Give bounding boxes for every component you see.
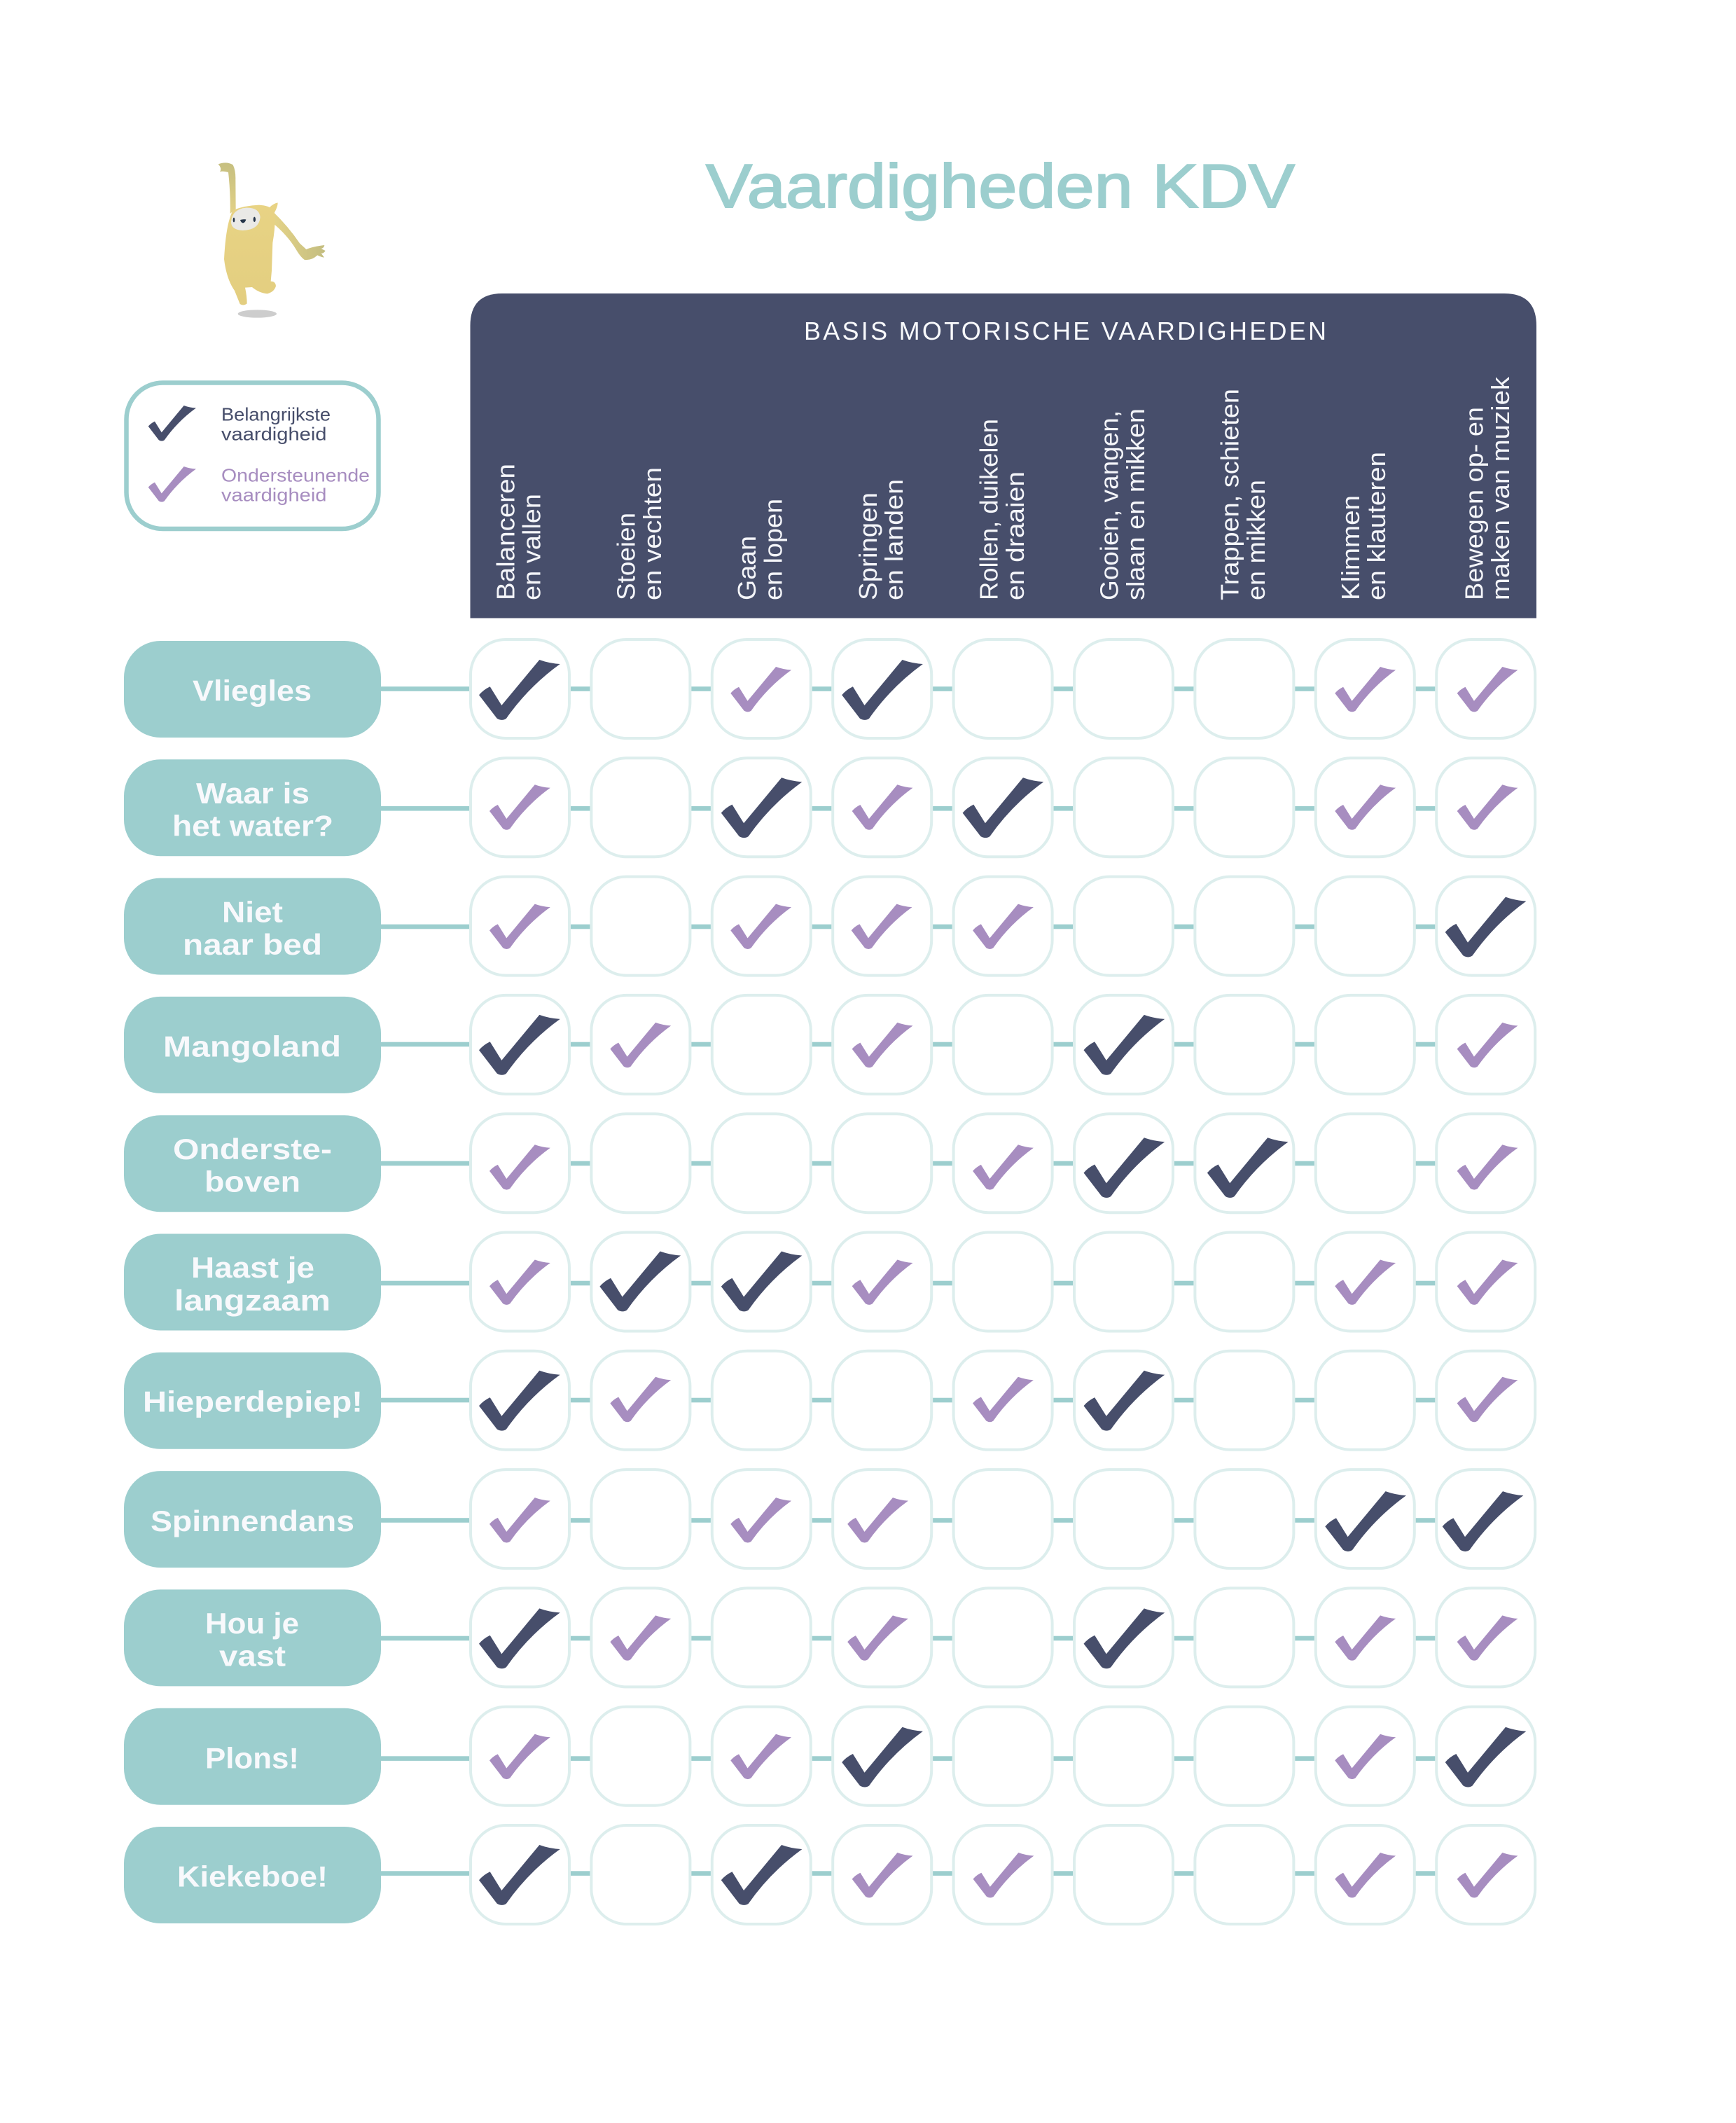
cell 3: supporting skill — [712, 1707, 811, 1806]
label: Onderste-boven: boven — [204, 1165, 300, 1198]
cell 3: supporting skill — [712, 877, 811, 976]
cell 3: supporting skill — [712, 639, 811, 738]
cell 5: empty — [954, 995, 1053, 1094]
label: Hou je vast — [124, 1589, 381, 1686]
cell 4: supporting skill — [833, 1233, 931, 1331]
cell 6: empty — [1074, 639, 1173, 738]
connector line — [378, 1161, 1443, 1166]
label: Hieperdepiep!: Hieperdepiep! — [143, 1385, 363, 1418]
label: Plons! — [124, 1708, 381, 1805]
column: Gooien, vangen, slaan en mikken — [1095, 408, 1150, 600]
cell 1: supporting skill — [471, 1469, 569, 1568]
cell 8: empty — [1316, 1114, 1415, 1212]
column: Stoeien en vechten: en vechten — [638, 467, 667, 600]
cell 7: empty — [1195, 995, 1293, 1094]
label: Niet naar bed: naar bed — [183, 928, 322, 961]
cell 2: empty — [591, 1825, 690, 1924]
label: Niet naar bed — [124, 878, 381, 975]
column: Gooien, vangen, slaan en mikken: Gooien, vangen, — [1095, 410, 1123, 600]
cell 8: supporting skill — [1316, 639, 1415, 738]
cell 1: supporting skill — [471, 877, 569, 976]
cell 5: supporting skill — [954, 1114, 1053, 1212]
cell 7: empty — [1195, 1588, 1293, 1687]
column: Gaan en lopen: en lopen — [759, 499, 787, 600]
column: Gaan en lopen — [732, 499, 787, 600]
label: Hou je vast: vast — [219, 1640, 286, 1673]
cell 6: main skill — [1074, 995, 1173, 1094]
cell 3: empty — [712, 1351, 811, 1450]
cell 8: supporting skill — [1316, 758, 1415, 857]
column: Trappen, schieten en mikken — [1216, 389, 1270, 600]
row: Kiekeboe! — [124, 1825, 1535, 1924]
row: Mangoland — [124, 995, 1535, 1094]
cell 2: empty — [591, 1114, 690, 1212]
column: Gaan en lopen: Gaan — [732, 536, 761, 600]
label: Waar is het water? — [124, 759, 381, 856]
connector line — [378, 1756, 1443, 1761]
cell 5: supporting skill — [954, 1825, 1053, 1924]
row: Vliegles — [124, 639, 1535, 738]
row: Spinnendans — [124, 1469, 1535, 1568]
mascot body — [224, 202, 278, 305]
label: Haast je langzaam: langzaam — [174, 1284, 331, 1317]
column: Rollen, duikelen en draaien — [975, 419, 1029, 600]
legend: main skill text: vaardigheid — [221, 424, 326, 445]
column: Springen en landen: en landen — [880, 479, 908, 600]
cell 3: main skill — [712, 1825, 811, 1924]
column: Bewegen op- en maken van muziek: Bewegen op- en — [1459, 407, 1489, 600]
label: Hou je vast: Hou je — [205, 1607, 299, 1640]
column: Balanceren en vallen: Balanceren — [492, 464, 520, 600]
column: Balanceren en vallen — [492, 464, 546, 600]
label: Kiekeboe! — [124, 1827, 381, 1923]
legend: main skill check — [148, 406, 196, 441]
cell 2: empty — [591, 1707, 690, 1806]
cell 4: supporting skill — [833, 1825, 931, 1924]
cell 7: empty — [1195, 1233, 1293, 1331]
cell 6: main skill — [1074, 1588, 1173, 1687]
column: Springen en landen: Springen — [854, 492, 882, 600]
column: Trappen, schieten en mikken: Trappen, schieten — [1216, 389, 1244, 600]
column: Gooien, vangen, slaan en mikken: slaan en mikken — [1121, 408, 1150, 600]
cell 7: empty — [1195, 1707, 1293, 1806]
column: Balanceren en vallen: en vallen — [517, 494, 546, 600]
cell 4: main skill — [833, 1707, 931, 1806]
cell 9: supporting skill — [1436, 1114, 1535, 1212]
cell 6: empty — [1074, 1233, 1173, 1331]
header heading: BASIS MOTORISCHE VAARDIGHEDEN — [804, 317, 1326, 345]
column: Stoeien en vechten — [612, 467, 667, 600]
cell 6: empty — [1074, 1469, 1173, 1568]
panel: table header — [471, 293, 1536, 618]
cell 9: supporting skill — [1436, 1825, 1535, 1924]
legend: main skill text — [221, 404, 331, 445]
label: Kiekeboe!: Kiekeboe! — [177, 1860, 328, 1893]
cell 2: empty — [591, 758, 690, 857]
row: Haast je langzaam — [124, 1233, 1535, 1331]
cell 8: supporting skill — [1316, 1233, 1415, 1331]
legend box — [126, 382, 378, 529]
cell 4: supporting skill — [833, 1588, 931, 1687]
label: Waar is het water?: Waar is — [196, 777, 310, 810]
cell 9: supporting skill — [1436, 1351, 1535, 1450]
cell 6: main skill — [1074, 1351, 1173, 1450]
column: Bewegen op- en maken van muziek: maken van muziek — [1486, 376, 1515, 600]
cell 1: supporting skill — [471, 1114, 569, 1212]
cell 4: supporting skill — [833, 877, 931, 976]
label: Waar is het water?: het water? — [172, 810, 333, 843]
cell 7: empty — [1195, 877, 1293, 976]
cell 9: main skill — [1436, 877, 1535, 976]
cell 4: supporting skill — [833, 1469, 931, 1568]
cell 6: empty — [1074, 758, 1173, 857]
cell 9: supporting skill — [1436, 639, 1535, 738]
label: Haast je langzaam: Haast je — [191, 1251, 314, 1284]
cell 1: supporting skill — [471, 1233, 569, 1331]
cell 1: main skill — [471, 995, 569, 1094]
column: Springen en landen — [854, 479, 908, 600]
cell 8: empty — [1316, 1351, 1415, 1450]
cell 2: empty — [591, 1469, 690, 1568]
connector line — [378, 1518, 1443, 1523]
cell 3: empty — [712, 1588, 811, 1687]
column: Klimmen en klauteren — [1336, 452, 1391, 600]
cell 2: supporting skill — [591, 995, 690, 1094]
cell 7: main skill — [1195, 1114, 1293, 1212]
row: Hou je vast — [124, 1588, 1535, 1687]
mascot right arm — [271, 212, 326, 260]
cell 8: empty — [1316, 877, 1415, 976]
cell 6: empty — [1074, 877, 1173, 976]
cell 5: empty — [954, 1707, 1053, 1806]
label: Hieperdepiep! — [124, 1353, 381, 1449]
label: Onderste-boven — [124, 1115, 381, 1212]
cell 9: main skill — [1436, 1707, 1535, 1806]
label: Spinnendans — [124, 1471, 381, 1568]
cell 5: main skill — [954, 758, 1053, 857]
connector line — [378, 1398, 1443, 1402]
cell 1: supporting skill — [471, 758, 569, 857]
mascot raised arm — [218, 162, 236, 214]
legend: supporting skill text: vaardigheid — [221, 484, 326, 505]
row: Onderste-boven — [124, 1114, 1535, 1212]
cell 5: empty — [954, 639, 1053, 738]
column: Klimmen en klauteren: en klauteren — [1362, 452, 1391, 600]
cell 8: supporting skill — [1316, 1825, 1415, 1924]
cell 1: main skill — [471, 1825, 569, 1924]
legend: main skill text: Belangrijkste — [221, 404, 331, 425]
cell 1: main skill — [471, 639, 569, 738]
cell 1: main skill — [471, 1351, 569, 1450]
connector line — [378, 686, 1443, 691]
cell 9: main skill — [1436, 1469, 1535, 1568]
column: Trappen, schieten en mikken: en mikken — [1242, 480, 1270, 600]
mascot: yellow jumping character — [218, 162, 326, 318]
cell 7: empty — [1195, 758, 1293, 857]
label: Vliegles — [124, 641, 381, 738]
cell 1: supporting skill — [471, 1707, 569, 1806]
cell 9: supporting skill — [1436, 1233, 1535, 1331]
connector line — [378, 1871, 1443, 1876]
label: Mangoland: Mangoland — [163, 1030, 341, 1063]
row: Hieperdepiep! — [124, 1351, 1535, 1450]
label: Haast je langzaam — [124, 1234, 381, 1331]
label: Vliegles: Vliegles — [193, 675, 312, 707]
row: Niet naar bed — [124, 877, 1535, 976]
connector line — [378, 1636, 1443, 1640]
cell 3: empty — [712, 1114, 811, 1212]
cell 7: empty — [1195, 1825, 1293, 1924]
cell 8: main skill — [1316, 1469, 1415, 1568]
cell 6: empty — [1074, 1707, 1173, 1806]
cell 4: empty — [833, 1351, 931, 1450]
cell 1: main skill — [471, 1588, 569, 1687]
column: Stoeien en vechten: Stoeien — [612, 513, 640, 600]
label: Plons!: Plons! — [205, 1741, 299, 1774]
connector line — [378, 1042, 1443, 1046]
cell 2: supporting skill — [591, 1588, 690, 1687]
cell 3: main skill — [712, 758, 811, 857]
connector line — [378, 1281, 1443, 1285]
legend: supporting skill text — [221, 464, 370, 505]
cell 9: supporting skill — [1436, 995, 1535, 1094]
cell 7: empty — [1195, 1469, 1293, 1568]
cell 7: empty — [1195, 1351, 1293, 1450]
legend: supporting skill check — [148, 466, 196, 502]
column: Rollen, duikelen en draaien: en draaien — [1001, 471, 1029, 600]
cell 8: empty — [1316, 995, 1415, 1094]
cell 7: empty — [1195, 639, 1293, 738]
cell 3: supporting skill — [712, 1469, 811, 1568]
cell 5: empty — [954, 1233, 1053, 1331]
cell 3: main skill — [712, 1233, 811, 1331]
column: Bewegen op- en maken van muziek — [1459, 376, 1515, 600]
cell 8: supporting skill — [1316, 1588, 1415, 1687]
label: Mangoland — [124, 997, 381, 1093]
cell 9: supporting skill — [1436, 1588, 1535, 1687]
row: Waar is het water? — [124, 758, 1535, 857]
label: Spinnendans: Spinnendans — [151, 1505, 354, 1537]
cell 2: main skill — [591, 1233, 690, 1331]
title: Vaardigheden KDV — [706, 151, 1295, 221]
cell 5: empty — [954, 1588, 1053, 1687]
cell 6: main skill — [1074, 1114, 1173, 1212]
cell 4: empty — [833, 1114, 931, 1212]
cell 2: empty — [591, 639, 690, 738]
cell 4: supporting skill — [833, 758, 931, 857]
legend: supporting skill text: Ondersteunende — [221, 464, 370, 485]
cell 9: supporting skill — [1436, 758, 1535, 857]
cell 8: supporting skill — [1316, 1707, 1415, 1806]
cell 4: main skill — [833, 639, 931, 738]
connector line — [378, 806, 1443, 811]
mascot shadow — [238, 310, 277, 318]
cell 5: empty — [954, 1469, 1053, 1568]
row: Plons! — [124, 1707, 1535, 1806]
label: Onderste-boven: Onderste- — [173, 1133, 332, 1166]
cell 2: empty — [591, 877, 690, 976]
cell 2: supporting skill — [591, 1351, 690, 1450]
cell 6: empty — [1074, 1825, 1173, 1924]
cell 5: supporting skill — [954, 1351, 1053, 1450]
column: Klimmen en klauteren: Klimmen — [1336, 495, 1365, 600]
cell 3: empty — [712, 995, 811, 1094]
connector line — [378, 925, 1443, 929]
label: Niet naar bed: Niet — [222, 895, 283, 928]
cell 4: supporting skill — [833, 995, 931, 1094]
mascot face — [231, 208, 261, 230]
column: Rollen, duikelen en draaien: Rollen, duikelen — [975, 419, 1003, 600]
mascot eyes and mouth — [233, 217, 256, 223]
cell 5: supporting skill — [954, 877, 1053, 976]
